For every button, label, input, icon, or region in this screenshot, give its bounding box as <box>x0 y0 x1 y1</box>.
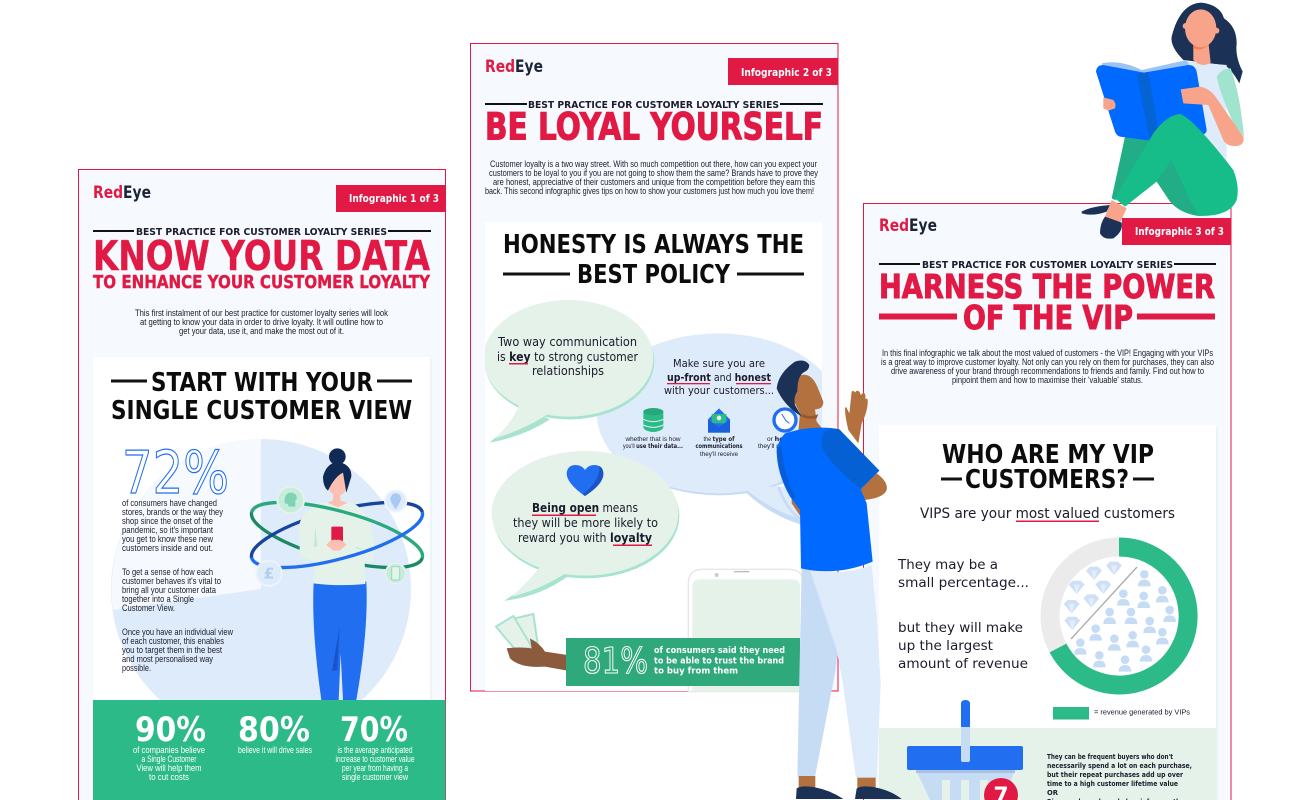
caption: communications <box>696 435 743 458</box>
card heading <box>941 440 1154 495</box>
caption: communications: the type of <box>704 435 735 443</box>
stat: 70%: is the average anticipated <box>338 745 412 755</box>
bubble: being open <box>492 451 679 601</box>
panel: infographic 2 of 3 <box>470 44 841 692</box>
icon: envelope <box>708 408 730 433</box>
badge: infographic 3 of 3 <box>1122 218 1231 245</box>
caption: communications: they'll receive <box>700 451 738 458</box>
intro text: customers to be loyal to you if you are not going to show them the same? Brands have to prove they <box>489 168 818 178</box>
legend <box>1053 707 1190 720</box>
caption: how often: they'll receive <box>758 443 798 450</box>
text: largest revenue: up the largest <box>898 638 993 654</box>
stat: 72%: 72% <box>122 438 229 507</box>
text: single customer view explanation: To get a sense of how each <box>122 567 213 578</box>
icon: pound <box>256 561 282 586</box>
intro text: drive awareness of your brand through recommendations to friends and family. Find out how to <box>891 366 1204 376</box>
text: frequent buyers: necessarily spend a lot on each purchase, <box>1047 762 1192 770</box>
series heading: BEST PRACTICE FOR CUSTOMER LOYALTY SERIES <box>528 100 779 111</box>
text: consumers changed: of consumers have changed <box>122 498 217 509</box>
card heading: HONESTY IS ALWAYS THE <box>503 230 804 260</box>
caption: how often: or how <box>767 435 790 443</box>
text: up-front and honest: with your customers... <box>664 385 774 397</box>
icon: location pin <box>385 490 406 512</box>
text: two way communication: Two way communication <box>497 335 637 349</box>
stat: 70%: increase to customer value <box>336 754 414 764</box>
text: individual view: you to target them in the best <box>122 645 222 656</box>
text: being open <box>513 501 658 546</box>
icon: phone <box>386 563 406 583</box>
pie background <box>111 439 411 739</box>
stat: 80%: believe it will drive sales <box>238 745 312 755</box>
stat: 90%: of companies believe <box>133 745 205 755</box>
donut chart <box>1050 547 1188 685</box>
banner: 81% stat: to buy from them <box>654 666 738 676</box>
icon: shopping basket <box>907 700 1023 800</box>
text: consumers changed: shop since the onset of the <box>122 516 213 527</box>
text: small percentage <box>897 557 1029 591</box>
logo: RedEye: RedEye <box>879 216 937 235</box>
stat: 90%: to cut costs <box>149 772 189 782</box>
text: single customer view explanation <box>122 567 221 614</box>
text: largest revenue <box>898 620 1028 672</box>
caption: data <box>623 436 683 450</box>
text: individual view: possible. <box>122 663 151 674</box>
icons: customers <box>1074 570 1176 672</box>
text: individual view: and most personalised way <box>122 654 213 665</box>
title <box>93 232 430 293</box>
card heading: CUSTOMERS? <box>965 465 1129 495</box>
badge: infographic 1 of 3: Infographic 1 of 3 <box>349 193 439 205</box>
text: frequent buyers <box>1047 753 1192 800</box>
banner: 81% stat: 81% <box>583 641 648 682</box>
text: largest revenue: amount of revenue <box>898 656 1028 672</box>
intro text: back. This second infographic gives tips on how to show your customers just how much you love them! <box>485 186 814 196</box>
icon: database <box>643 408 663 432</box>
card: honesty <box>483 222 841 692</box>
text: largest revenue: but they will make <box>898 620 1023 636</box>
panel: infographic 1 of 3 <box>78 170 446 800</box>
intro text <box>135 308 388 336</box>
icon: hand with notes <box>496 614 567 671</box>
logo: RedEye: RedEye <box>93 183 151 202</box>
card heading: WHO ARE MY VIP <box>942 440 1154 470</box>
card heading: START WITH YOUR <box>151 368 373 398</box>
text: individual view: Once you have an individual view <box>122 627 233 638</box>
card: who are my VIP customers <box>879 425 1218 800</box>
text: single customer view explanation: customer behaves it's vital to <box>122 576 221 587</box>
text: individual view: of each customer, this enables <box>122 636 224 647</box>
icon: head <box>277 487 304 513</box>
stat: 70%: 70% <box>340 710 408 750</box>
banner: 81% stat: to be able to trust the brand <box>654 656 784 666</box>
text: being open: they will be more likely to <box>513 516 658 530</box>
text: consumers changed: customers inside and out. <box>122 543 213 554</box>
text: consumers changed: stores, brands or the way they <box>122 507 223 518</box>
card heading <box>503 230 804 290</box>
panel: infographic 3 of 3 <box>864 204 1231 800</box>
intro text: are honest, appreciative of their customers and unique from the competition before they earn this <box>493 177 815 187</box>
stat: 80%: 80% <box>238 710 310 750</box>
banner: 81% stat: of consumers said they need <box>654 646 785 656</box>
intro text: get your data, use it, and make the most out of it. <box>179 326 344 336</box>
text: frequent buyers: time to a high customer lifetime value <box>1047 780 1178 788</box>
stat: 70%: single customer view <box>342 772 408 782</box>
text: consumers changed: you get to know these new <box>122 534 213 545</box>
title: TO ENHANCE YOUR CUSTOMER LOYALTY <box>93 273 430 293</box>
banner: 81% stat <box>566 638 800 686</box>
text: being open: Being open means <box>532 501 638 515</box>
icon: heart <box>567 465 603 496</box>
icons: diamonds <box>1064 562 1122 630</box>
text: frequent buyers: OR <box>1047 789 1059 797</box>
stat: 90%: View will help them <box>136 763 202 773</box>
caption: data: you'll use their data... <box>623 442 683 450</box>
icon: clock <box>774 409 796 431</box>
text: single customer view explanation: Customer View. <box>122 603 175 614</box>
stat: 90%: 90% <box>135 710 206 750</box>
title: BE LOYAL YOURSELF <box>485 106 823 148</box>
band: green stats <box>93 700 446 800</box>
illustration: woman reading a book <box>1082 3 1244 239</box>
intro text: is a great way to improve customer loyalty. Not only can you rely on them for purchases, they can also <box>881 357 1214 367</box>
series heading: BEST PRACTICE FOR CUSTOMER LOYALTY SERIES <box>136 227 387 238</box>
text: small percentage: small percentage... <box>898 575 1029 591</box>
title: OF THE VIP <box>963 298 1133 337</box>
caption: communications: communications <box>696 443 743 450</box>
text: up-front and honest: up-front and honest <box>667 372 771 384</box>
intro text <box>881 348 1214 385</box>
intro text: In this final infographic we talk about the most valued of customers - the VIP! Engaging with your VIPs <box>882 348 1213 358</box>
caption: how often <box>758 435 798 450</box>
card heading: SINGLE CUSTOMER VIEW <box>111 396 412 426</box>
intro text: at getting to know your data in order to drive loyalty. It will outline how to <box>140 317 383 327</box>
badge: infographic 3 of 3: Infographic 3 of 3 <box>1135 226 1224 238</box>
text: two way communication: relationships <box>532 364 604 378</box>
intro text: pinpoint them and how to maximise their 'valuable' status. <box>952 375 1143 385</box>
text: single customer view explanation: together into a Single <box>122 594 194 605</box>
title <box>879 267 1215 337</box>
badge: infographic 2 of 3 <box>728 58 838 85</box>
text: consumers changed <box>122 498 223 554</box>
text: individual view <box>122 627 233 674</box>
icon: pound: £ <box>264 565 274 583</box>
phone outline <box>688 569 803 692</box>
stat: 90%: a Single Customer <box>142 754 196 764</box>
card heading <box>111 368 412 426</box>
intro text: Customer loyalty is a two way street. With so much competition out there, how can you expect your <box>490 159 817 169</box>
title: HARNESS THE POWER <box>879 267 1215 306</box>
text: two way communication: is key to strong customer <box>497 350 638 364</box>
text: being open: reward you with loyalty <box>518 531 652 545</box>
illustration: woman with orbiting rings <box>245 448 429 700</box>
logo: RedEye: RedEye <box>485 57 543 76</box>
text: up-front and honest: Make sure you are <box>673 358 765 370</box>
title: KNOW YOUR DATA <box>93 232 430 280</box>
text: two way communication <box>497 335 638 378</box>
text: small percentage: They may be a <box>897 557 998 573</box>
text: consumers changed: pandemic, so it's important <box>122 525 213 536</box>
card heading: BEST POLICY <box>577 260 730 290</box>
subheading: VIPS are your most valued customers <box>920 506 1175 522</box>
intro text <box>485 159 818 196</box>
intro text: This first instalment of our best practice for customer loyalty series will look <box>135 308 388 318</box>
illustration: man looking up <box>777 361 902 799</box>
series heading: BEST PRACTICE FOR CUSTOMER LOYALTY SERIES <box>922 260 1173 271</box>
badge: infographic 2 of 3: Infographic 2 of 3 <box>741 67 832 79</box>
bubble: two way communication <box>483 300 654 443</box>
text: frequent buyers: but their repeat purchases add up over <box>1047 771 1183 779</box>
bubble: up-front and honest <box>597 333 841 527</box>
badge: infographic 1 of 3 <box>336 185 446 212</box>
caption: data: whether that is how <box>625 436 681 443</box>
stat: 70% <box>336 710 414 782</box>
legend: = revenue generated by VIPs <box>1094 708 1190 716</box>
text: up-front and honest <box>664 358 774 397</box>
card: single customer view <box>93 357 446 800</box>
text: single customer view explanation: bring all your customer data <box>122 585 217 596</box>
band: pale green section <box>879 700 1216 800</box>
text: frequent buyers: They can be frequent buyers who don't <box>1047 753 1174 761</box>
stat: 70%: per year from having a <box>342 763 408 773</box>
stat: 90% <box>133 710 206 782</box>
